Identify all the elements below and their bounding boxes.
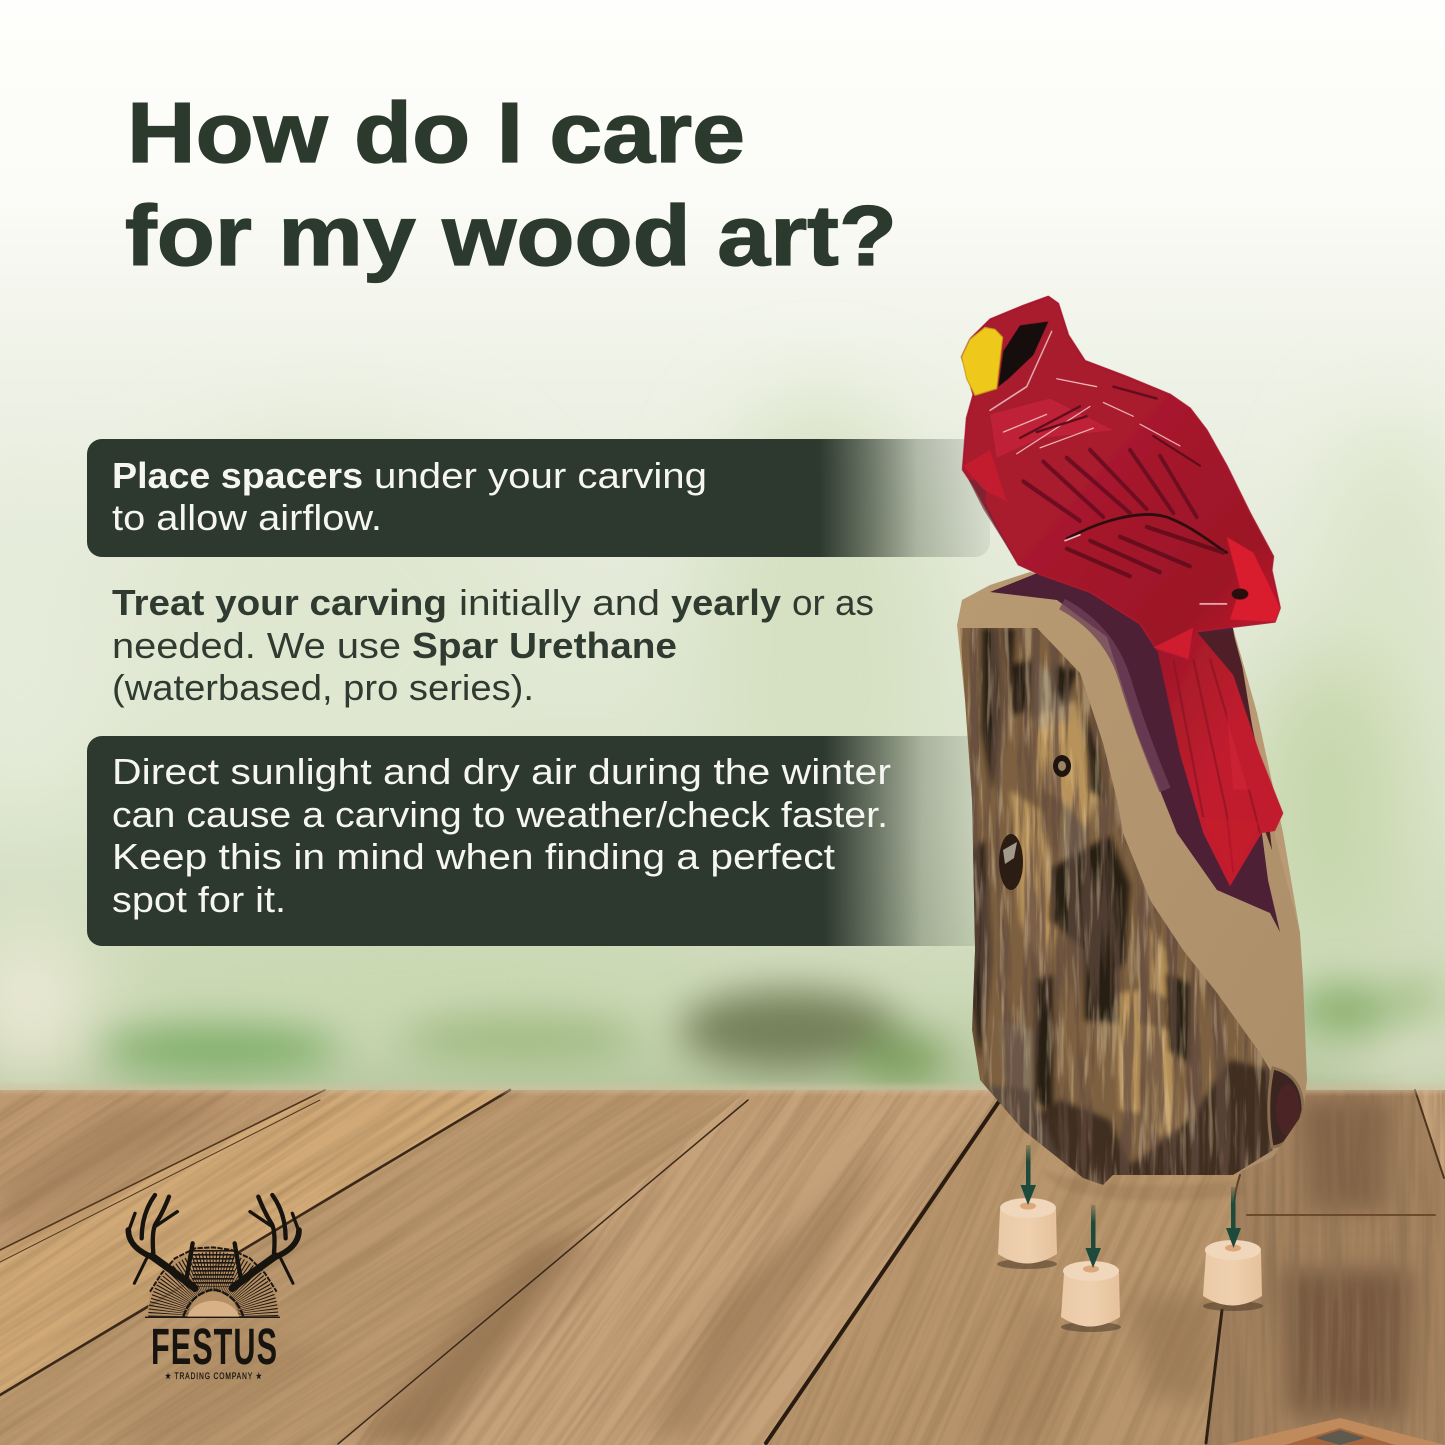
icon: left antler: [128, 1195, 195, 1288]
panel: direct sunlight: spot for it.: [112, 879, 286, 920]
spacer: cork middle: [1061, 1261, 1121, 1332]
title: for my wood art?: [125, 189, 897, 284]
body: [962, 297, 1280, 659]
logo tagline: ★ TRADING COMPANY ★: [165, 1371, 262, 1381]
text block: treat your carving: or as: [792, 582, 874, 623]
wooden floor: [0, 1084, 1445, 1445]
logo wordmark: FESTUS: [151, 1318, 277, 1375]
text block: treat your carving: initially and: [459, 582, 660, 623]
title: How do I care: [127, 86, 745, 181]
black mask: [998, 321, 1048, 387]
panel: place spacers: under your carving: [374, 455, 707, 496]
text block: treat your carving: needed. We use: [112, 625, 401, 666]
text block: treat your carving: (waterbased, pro series).: [112, 667, 534, 708]
tail: [1157, 632, 1283, 886]
breast shadow and highlights: [963, 398, 1280, 659]
panel: direct sunlight: Keep this in mind when finding a perfect: [112, 836, 835, 877]
panel: place spacers: [87, 439, 990, 557]
icon: stump rings: [145, 1247, 280, 1317]
panel: direct sunlight: Direct sunlight and dry air during the winter: [112, 751, 891, 792]
spacer: cork left: [997, 1198, 1057, 1269]
carving: wood log: [950, 565, 1315, 1195]
title: [125, 86, 897, 284]
text block: treat your carving: yearly: [671, 582, 781, 623]
arrow: middle spacer: [1086, 1205, 1101, 1268]
arrow: right spacer: [1226, 1187, 1241, 1248]
icon: right antler: [232, 1195, 299, 1288]
shadow under the log: [1040, 1170, 1245, 1201]
beak: [962, 327, 1003, 395]
logo: Festus Trading Company: [128, 1195, 299, 1381]
panel: place spacers: Place spacers: [112, 455, 363, 496]
purple heartwood band: [990, 572, 1280, 932]
carving: red cardinal: [962, 297, 1283, 886]
text block: treat your carving: Treat your carving: [112, 582, 447, 623]
text block: treat your carving: Spar Urethane: [412, 625, 677, 666]
dark underside: [1020, 1060, 1275, 1190]
plank tone streaks: [0, 1100, 1412, 1445]
text block: treat your carving: [112, 582, 874, 708]
knots: [1053, 755, 1071, 777]
panel: direct sunlight: [87, 736, 985, 946]
background: blurred garden: [0, 0, 1445, 1100]
panel: direct sunlight: can cause a carving to weather/check faster.: [112, 794, 888, 835]
bark: [960, 628, 1273, 1185]
spacer: cork right: [1203, 1240, 1263, 1311]
arrow: left spacer: [1020, 1145, 1036, 1205]
panel: place spacers: to allow airflow.: [112, 497, 382, 538]
wing feathers: [990, 331, 1227, 604]
patterned wood at lower right: [1225, 1418, 1445, 1445]
